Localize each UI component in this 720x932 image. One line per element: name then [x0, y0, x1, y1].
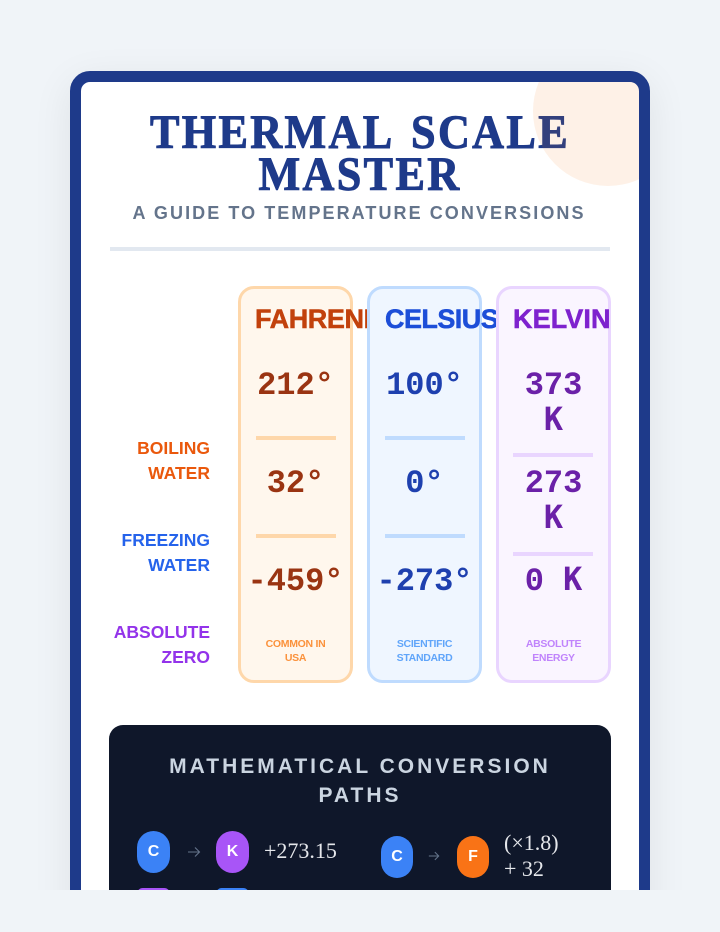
title — [150, 106, 570, 201]
kelvin 373: K — [544, 400, 563, 438]
panel: conversion paths — [109, 725, 611, 925]
badge: C second: C — [391, 848, 403, 865]
kelvin heading: KELVIN — [513, 304, 611, 334]
badge: K lower row — [137, 888, 170, 930]
badge: F — [457, 836, 489, 878]
celsius -273: -273° — [376, 563, 472, 600]
celsius 100: 100° — [386, 367, 463, 404]
decorative peach circle — [533, 82, 639, 186]
fahrenheit note — [266, 638, 325, 664]
row label: boiling water: BOILING — [137, 438, 210, 458]
badge: C — [137, 831, 170, 873]
fahrenheit -459: -459° — [247, 563, 344, 600]
celsius note: SCIENTIFIC — [397, 638, 452, 650]
row label: freezing water: FREEZING — [122, 530, 210, 550]
arrow — [188, 847, 200, 857]
kelvin note — [526, 638, 582, 664]
formula: plus 273.15: +273.15 — [264, 838, 337, 863]
kelvin 373 — [525, 367, 582, 438]
formula: times 1.8 plus 32: (×1.8) — [504, 830, 559, 855]
kelvin 0: 0 K — [525, 560, 582, 600]
fahrenheit note: USA — [285, 652, 306, 664]
kelvin 273: 273 — [525, 465, 582, 502]
kelvin note: ABSOLUTE — [526, 638, 581, 650]
badge: C: C — [148, 843, 159, 860]
kelvin 373: 373 — [525, 367, 582, 404]
badge: K: K — [227, 843, 238, 860]
badge: F: F — [468, 848, 478, 865]
row label: boiling water: WATER — [148, 463, 210, 483]
celsius note: STANDARD — [397, 652, 452, 664]
row label: absolute zero: ZERO — [161, 647, 210, 667]
header divider — [110, 247, 610, 251]
kelvin 273 — [525, 465, 582, 536]
badge: C lower row — [216, 888, 249, 930]
row label: freezing water — [122, 530, 210, 575]
title: THERMAL SCALE — [150, 106, 570, 159]
fahrenheit 212: 212° — [257, 367, 334, 404]
title: MASTER — [258, 148, 462, 201]
conversion heading: PATHS — [318, 784, 402, 806]
fahrenheit note: COMMON IN — [266, 638, 325, 650]
conversion heading: MATHEMATICAL CONVERSION — [169, 755, 551, 778]
kelvin 273: K — [544, 498, 563, 536]
row label: freezing water: WATER — [148, 555, 210, 575]
row label: boiling water — [137, 438, 210, 483]
celsius note — [397, 638, 452, 664]
kelvin note: ENERGY — [532, 652, 575, 664]
row label: absolute zero — [114, 622, 210, 667]
badge: K — [216, 831, 249, 873]
arrow second — [428, 852, 440, 860]
celsius 0: 0° — [405, 465, 444, 502]
subtitle: A GUIDE TO TEMPERATURE CONVERSIONS — [132, 203, 586, 223]
formula: times 1.8 plus 32 — [504, 830, 559, 881]
fahrenheit 32: 32° — [267, 465, 324, 502]
card frame — [70, 71, 650, 932]
badge: C second — [381, 836, 413, 878]
row label: absolute zero: ABSOLUTE — [114, 622, 210, 642]
formula: times 1.8 plus 32: + 32 — [504, 856, 544, 881]
celsius heading: CELSIUS — [385, 304, 498, 334]
conversion heading — [169, 755, 551, 806]
